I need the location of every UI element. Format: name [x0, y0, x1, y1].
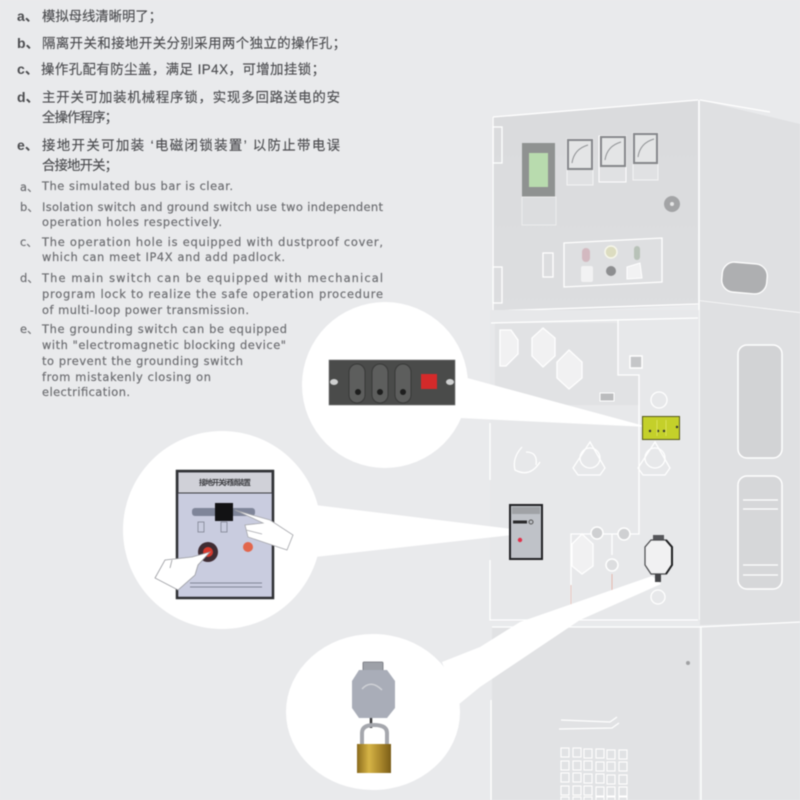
Chinese feature list: 接地开关可加装 ‘电磁闭锁装置’ 以防止带电误: [42, 137, 340, 153]
icon: padlock: [357, 725, 391, 773]
English feature list: program lock to realize the safe operation procedure: [42, 287, 383, 301]
English feature list: of multi-loop power transmission.: [42, 303, 249, 317]
English feature list: c、: [20, 235, 38, 249]
upper round cover: [651, 392, 667, 408]
screw: [686, 661, 690, 665]
yellow lock on cabinet: [642, 416, 680, 440]
key switch: [664, 196, 680, 212]
English feature list: a、: [20, 180, 38, 194]
lower cabinet compartment: [491, 622, 800, 800]
Chinese feature list: a、: [17, 8, 39, 24]
callout: electromagnetic blocking device: [123, 431, 512, 629]
icon: right hand pressing slider: [235, 510, 293, 550]
English feature list: operation holes respectively.: [42, 215, 222, 229]
side handle: [721, 261, 768, 295]
Chinese feature list: b、: [17, 35, 40, 51]
dust cover on cabinet: [645, 535, 672, 582]
lower circuit nodes: [571, 527, 630, 607]
switchgear cabinet: [490, 100, 800, 800]
photo: program lock panel: [329, 360, 455, 405]
digital display unit: [522, 143, 556, 225]
lower blob knob: [572, 534, 593, 574]
Chinese feature list: 模拟母线清晰明了；: [42, 9, 162, 25]
English feature list: The operation hole is equipped with dustproof cover,: [41, 235, 383, 249]
Chinese feature list: 合接地开关；: [42, 157, 118, 174]
English feature list: e、: [20, 322, 38, 336]
English feature list: The main switch can be equipped with mechanical: [41, 271, 383, 285]
middle cabinet compartment: [490, 301, 800, 625]
electromagnetic device faceplate: [177, 471, 273, 598]
English feature list: from mistakenly closing on: [42, 370, 211, 384]
operation hole cover: [352, 662, 395, 728]
English feature list: [20, 179, 384, 399]
indicator square: [630, 356, 642, 368]
English feature list: The grounding switch can be equipped: [41, 322, 287, 336]
blocking device on cabinet: [510, 505, 542, 559]
callout bubble and pointer: [302, 302, 648, 468]
knob shapes, upper row: [500, 328, 582, 389]
Chinese feature list: [17, 8, 346, 174]
vent grid: [561, 748, 627, 800]
callout: mechanical program lock: [302, 302, 648, 468]
slot: [543, 253, 553, 277]
English feature list: to prevent the grounding switch: [42, 354, 243, 368]
English feature list: The simulated bus bar is clear.: [41, 179, 233, 193]
electromagnetic device faceplate: 接地开关闭锁装置: [199, 477, 252, 487]
Chinese feature list: 操作孔配有防尘盖，满足 IP4X，可增加挂锁；: [41, 62, 325, 78]
English feature list: b、: [20, 200, 39, 214]
indicator button box: [564, 238, 662, 287]
Chinese feature list: 全操作程序；: [42, 109, 118, 126]
triangular knobs: [514, 442, 670, 475]
callout bubble and pointer: [286, 576, 661, 790]
English feature list: Isolation switch and ground switch use two independent: [42, 200, 384, 214]
callout: padlock on operation hole: [286, 576, 661, 790]
English feature list: which can meet IP4X and add padlock.: [42, 250, 285, 264]
upper cabinet compartment: [492, 100, 800, 620]
lower round cover: [651, 590, 665, 604]
English feature list: d、: [20, 271, 39, 285]
door hinges: [493, 127, 502, 303]
icon: left hand pressing button: [155, 552, 210, 590]
small label plate: [600, 393, 614, 401]
callout bubble and pointer: [123, 431, 512, 629]
Chinese feature list: d、: [17, 89, 40, 105]
English feature list: with "electromagnetic blocking device": [42, 338, 286, 352]
vent lines: [559, 717, 619, 729]
English feature list: electrification.: [42, 385, 130, 399]
side windows: [738, 345, 782, 589]
Chinese feature list: e、: [17, 137, 39, 153]
Chinese feature list: c、: [17, 61, 39, 77]
analog meters: [567, 133, 658, 185]
Chinese feature list: 隔离开关和接地开关分别采用两个独立的操作孔；: [42, 35, 346, 52]
Chinese feature list: 主开关可加装机械程序锁，实现多回路送电的安: [42, 89, 340, 105]
